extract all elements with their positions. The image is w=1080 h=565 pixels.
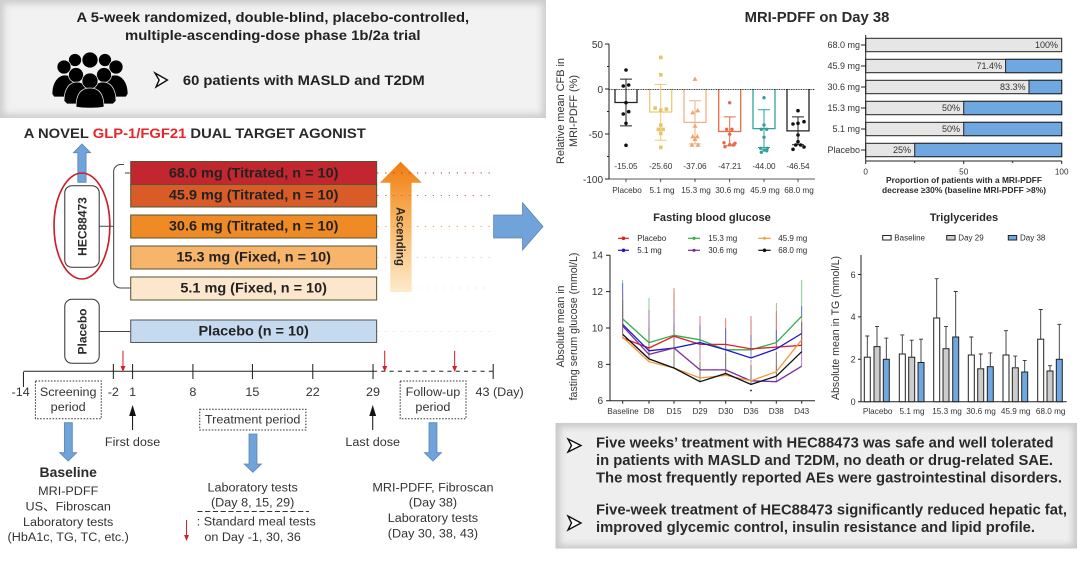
text: baseline assessments: US、Fibroscan bbox=[26, 500, 111, 513]
panel: trial design header bbox=[0, 0, 546, 118]
annotation: last dose bbox=[345, 405, 400, 449]
arrow: ascending doses bbox=[380, 162, 422, 292]
left column: design and timeline bbox=[8, 126, 543, 544]
time labels: D43 bbox=[794, 407, 810, 416]
legend: Day 38 bbox=[1020, 234, 1046, 242]
y axis: Relative mean CFB in bbox=[555, 58, 567, 164]
dose labels: 15.3 mg bbox=[681, 186, 711, 195]
percent labels bbox=[893, 40, 1058, 155]
chart: relative mean change in MRI-PDFF bbox=[555, 40, 815, 195]
axes: 8 bbox=[597, 360, 603, 371]
text: efficacy conclusion: improved glycemic control, insulin resistance and lipid profile. bbox=[596, 520, 1035, 536]
axes: Absolute mean in TG (mmol/L) bbox=[830, 256, 842, 400]
box: treatment period: Treatment period bbox=[205, 413, 300, 426]
icon: arrow to baseline bbox=[60, 423, 77, 461]
axes: 10 bbox=[592, 324, 603, 334]
percent labels: 50% bbox=[942, 103, 960, 113]
text: treatment assessments: : Standard meal tests bbox=[197, 515, 316, 529]
arrow: ascending doses: Ascending bbox=[393, 207, 406, 266]
day 29 bars bbox=[874, 347, 1053, 402]
dose labels: 15.3 mg bbox=[932, 407, 962, 416]
text: baseline assessments: (HbA1c, TG, TC, etc.) bbox=[8, 530, 129, 544]
chart title: Triglycerides bbox=[930, 212, 998, 224]
axes bbox=[555, 250, 815, 407]
axis title bbox=[882, 175, 1046, 195]
bullet arrow 1 bbox=[568, 439, 581, 452]
text: patient population: 60 patients with MASLD and T2DM bbox=[183, 73, 425, 89]
baseline bars bbox=[864, 318, 1044, 402]
box: screening period: period bbox=[51, 400, 86, 414]
percent labels: 50% bbox=[942, 124, 960, 134]
text: efficacy conclusion bbox=[596, 502, 1067, 536]
legend: 45.9 mg bbox=[778, 234, 807, 243]
axes: 12 bbox=[592, 287, 603, 298]
y axis: 0 bbox=[597, 85, 603, 96]
text: treatment assessments bbox=[197, 480, 316, 544]
arm: 30.6 mg: 30.6 mg (Titrated, n = 10) bbox=[169, 219, 339, 234]
dose labels bbox=[612, 186, 814, 195]
legend bbox=[883, 234, 1046, 242]
chart: proportion of patients with MRI-PDFF decrease bbox=[827, 35, 1069, 195]
dose labels: Placebo bbox=[612, 186, 642, 195]
text: baseline assessments: Baseline bbox=[40, 465, 97, 480]
day labels: 43 (Day) bbox=[475, 385, 524, 399]
annotation: last dose: Last dose bbox=[345, 435, 400, 449]
axes: 2 bbox=[851, 354, 856, 364]
legend: Day 29 bbox=[958, 234, 984, 242]
text: efficacy conclusion: Five-week treatment of HEC88473 significantly reduced hepatic fat, bbox=[596, 502, 1067, 518]
arm: 5.1 mg bbox=[131, 277, 377, 300]
arm: 68.0 mg: 68.0 mg (Titrated, n = 10) bbox=[169, 166, 339, 181]
legend: 5.1 mg bbox=[637, 246, 662, 255]
day labels: -2 bbox=[108, 385, 119, 399]
arm: 15.3 mg bbox=[131, 246, 377, 269]
annotation: first dose: First dose bbox=[105, 435, 160, 449]
box: treatment period bbox=[200, 409, 306, 430]
chart: proportion of patients with MRI-PDFF decrease: 0 bbox=[863, 168, 868, 176]
legend: Baseline bbox=[894, 234, 926, 242]
text: safety conclusion bbox=[596, 435, 1062, 486]
text: follow-up assessments: Laboratory tests bbox=[388, 511, 478, 525]
bullet arrow 2 bbox=[568, 516, 581, 530]
percent labels: 25% bbox=[893, 145, 911, 155]
legend: 68.0 mg bbox=[778, 246, 807, 255]
text: treatment assessments: (Day 8, 15, 29) bbox=[211, 496, 294, 510]
heading: trial description: A 5-week randomized, double-blind, placebo-controlled, bbox=[76, 10, 469, 26]
mean values: -47.21 bbox=[718, 162, 742, 171]
error bars bbox=[623, 280, 802, 384]
dose labels: 30.6 mg bbox=[715, 186, 745, 195]
time labels: D8 bbox=[644, 407, 655, 416]
axes: 4 bbox=[851, 312, 856, 322]
time labels: D29 bbox=[692, 407, 708, 416]
legend: 15.3 mg bbox=[708, 234, 737, 243]
icon: group of people bbox=[52, 52, 128, 108]
box: screening period bbox=[35, 381, 101, 419]
panel: conclusions bbox=[556, 423, 1077, 548]
axis title: decrease ≥30% (baseline MRI-PDFF >8%) bbox=[882, 185, 1046, 195]
mean values: -37.06 bbox=[683, 162, 707, 171]
icon: red test arrows bbox=[123, 351, 455, 538]
panel: placebo arm: Placebo bbox=[75, 309, 89, 354]
axis title: Proportion of patients with a MRI-PDFF bbox=[886, 175, 1042, 185]
red arrowheads bbox=[120, 366, 457, 541]
icon: arrow to treatment tests bbox=[244, 434, 261, 472]
arm: 5.1 mg: 5.1 mg (Fixed, n = 10) bbox=[180, 281, 327, 296]
arm: 45.9 mg bbox=[131, 184, 377, 207]
panel: dose arms bbox=[54, 144, 422, 300]
text: safety conclusion: The most frequently reported AEs were gastrointestinal disorders. bbox=[596, 470, 1062, 486]
mean values bbox=[614, 162, 810, 171]
dose labels: 68.0 mg bbox=[784, 186, 814, 195]
axes: Absolute mean in bbox=[555, 285, 567, 367]
legend: 30.6 mg bbox=[708, 246, 737, 255]
day labels: 1 bbox=[129, 385, 136, 399]
y axis: -100 bbox=[583, 175, 603, 186]
text: treatment assessments: on Day -1, 30, 36 bbox=[204, 530, 301, 544]
day labels: 22 bbox=[306, 385, 320, 399]
day labels bbox=[12, 385, 524, 399]
dose labels: 30.6 mg bbox=[966, 407, 996, 416]
percent labels: 83.3% bbox=[1000, 82, 1026, 92]
category labels: 30.6 mg bbox=[827, 82, 860, 92]
day labels: -14 bbox=[12, 385, 30, 399]
dose labels: 5.1 mg bbox=[649, 186, 675, 195]
axes: 0 bbox=[851, 397, 856, 407]
category labels bbox=[827, 40, 860, 155]
day labels: 15 bbox=[245, 385, 260, 399]
axes: 6 bbox=[851, 270, 856, 280]
mean values: -15.05 bbox=[614, 162, 638, 171]
dose labels: 45.9 mg bbox=[750, 186, 780, 195]
chart: triglycerides bbox=[830, 212, 1067, 416]
arrow: to results bbox=[494, 203, 543, 250]
error bars bbox=[865, 279, 1061, 372]
data points bbox=[622, 68, 630, 147]
heading: trial description: multiple-ascending-dose phase 1b/2a trial bbox=[125, 28, 421, 44]
time labels: D36 bbox=[743, 407, 759, 416]
day 38 bars bbox=[883, 337, 1062, 402]
bars bbox=[615, 89, 809, 132]
text: baseline assessments: MRI-PDFF bbox=[38, 484, 99, 498]
box: screening period: Screening bbox=[40, 385, 97, 399]
panel: placebo arm bbox=[65, 299, 377, 363]
day labels: 29 bbox=[366, 385, 380, 399]
y axis: -50 bbox=[589, 130, 603, 141]
heading: MRI-PDFF on Day 38: MRI-PDFF on Day 38 bbox=[745, 10, 889, 26]
axes bbox=[861, 35, 1062, 164]
box: follow-up period bbox=[400, 381, 466, 419]
arm: 15.3 mg: 15.3 mg (Fixed, n = 10) bbox=[176, 250, 331, 265]
percent labels: 71.4% bbox=[976, 61, 1002, 71]
dose labels: 68.0 mg bbox=[1036, 407, 1066, 416]
icon: bullet arrow bbox=[155, 73, 167, 87]
mean values: -44.00 bbox=[752, 162, 776, 171]
arm: 30.6 mg bbox=[131, 215, 377, 238]
panel: placebo arm: Placebo (n = 10) bbox=[198, 324, 309, 339]
axes: 14 bbox=[592, 250, 603, 262]
time labels: D38 bbox=[769, 407, 784, 416]
text: safety conclusion: Five weeks’ treatment with HEC88473 was safe and well tolerated bbox=[596, 435, 1054, 451]
label: HEC88473 bbox=[65, 186, 99, 267]
time labels: D15 bbox=[666, 407, 682, 416]
arm: 68.0 mg bbox=[131, 162, 377, 184]
chart title: Fasting blood glucose bbox=[653, 212, 771, 224]
text: safety conclusion: in patients with MASLD and T2DM, no death or drug-related SAE. bbox=[596, 453, 1053, 469]
legend: Placebo bbox=[637, 234, 667, 243]
mean values: -46.54 bbox=[786, 162, 810, 171]
y axis: 50 bbox=[592, 40, 603, 51]
text: baseline assessments: Laboratory tests bbox=[23, 515, 113, 529]
heading: trial description bbox=[76, 10, 469, 44]
icon: up arrow from drug bbox=[73, 144, 91, 182]
legend bbox=[618, 234, 807, 255]
arm: 45.9 mg: 45.9 mg (Titrated, n = 10) bbox=[169, 188, 339, 203]
mean values: -25.60 bbox=[649, 162, 673, 171]
time labels: D30 bbox=[718, 407, 734, 416]
annotation: first dose bbox=[105, 405, 160, 449]
text: follow-up assessments: MRI-PDFF, Fibroscan bbox=[372, 481, 494, 494]
dose labels: 5.1 mg bbox=[899, 407, 925, 416]
dose labels bbox=[863, 407, 1066, 416]
label: HEC88473: HEC88473 bbox=[75, 197, 89, 256]
icon: arrow to follow-up tests bbox=[424, 423, 441, 461]
axes: 6 bbox=[597, 396, 603, 407]
category labels: 15.3 mg bbox=[827, 103, 860, 113]
box: follow-up period: period bbox=[415, 400, 451, 414]
chart: proportion of patients with MRI-PDFF decrease: 100 bbox=[1055, 168, 1069, 176]
dose labels: 45.9 mg bbox=[1001, 407, 1031, 416]
y axis: MRI-PDFF (%) bbox=[568, 75, 580, 147]
icon: red ellipse around drug name bbox=[54, 173, 110, 279]
category labels: 5.1 mg bbox=[832, 124, 860, 134]
text: follow-up assessments: (Day 30, 38, 43) bbox=[388, 527, 478, 540]
series lines bbox=[623, 316, 802, 384]
y axis bbox=[555, 40, 609, 186]
dose labels: Placebo bbox=[863, 407, 893, 416]
heading: novel dual target agonist: A NOVEL GLP-1/FGF21 DUAL TARGET AGONIST bbox=[24, 126, 366, 142]
text: follow-up assessments bbox=[372, 481, 494, 540]
timeline bbox=[12, 351, 524, 541]
chart: proportion of patients with MRI-PDFF decrease: 50 bbox=[959, 168, 969, 176]
axes: fasting serum glucose (mmol/L) bbox=[568, 253, 580, 400]
box: follow-up period: Follow-up bbox=[406, 385, 460, 399]
chart: fasting blood glucose bbox=[555, 212, 815, 416]
time labels bbox=[607, 407, 810, 416]
category labels: Placebo bbox=[827, 145, 860, 155]
percent labels: 100% bbox=[1035, 40, 1058, 50]
text: baseline assessments bbox=[8, 465, 129, 544]
category labels: 68.0 mg bbox=[827, 40, 860, 50]
day labels: 8 bbox=[189, 385, 197, 399]
category labels: 45.9 mg bbox=[827, 61, 860, 71]
bracket linking drug to doses bbox=[99, 164, 130, 288]
axes bbox=[830, 255, 1067, 407]
time labels: Baseline bbox=[607, 407, 639, 416]
error bars bbox=[620, 79, 804, 148]
text: treatment assessments: Laboratory tests bbox=[207, 480, 298, 494]
text: follow-up assessments: (Day 38) bbox=[409, 496, 457, 510]
